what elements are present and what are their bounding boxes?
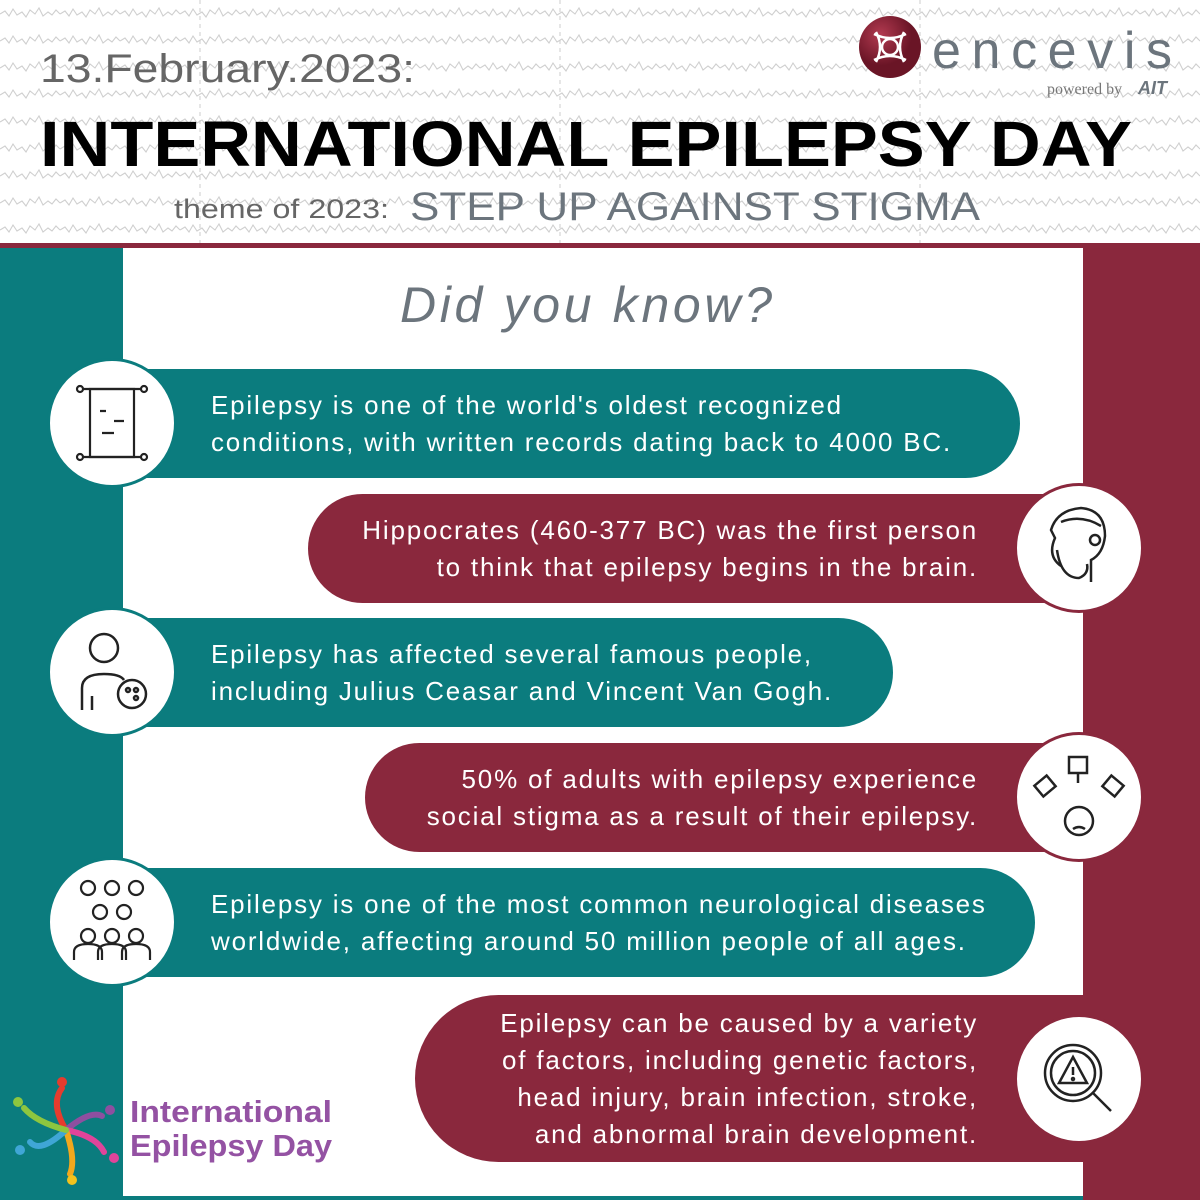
panel: fact 6: head injury, brain infection, stroke, (517, 1082, 978, 1112)
theme subtitle (174, 185, 980, 229)
icon: magnifier warning (1014, 1014, 1144, 1144)
icon: stigma pointing (1014, 732, 1144, 862)
theme subtitle: theme of 2023: (174, 194, 389, 224)
panel: fact 6 (415, 995, 1098, 1162)
logo: International Epilepsy Day (13, 1077, 333, 1185)
right maroon strip (1083, 248, 1200, 1200)
panel: fact 4 (365, 743, 1098, 852)
panel: fact 2: to think that epilepsy begins in the brain. (437, 552, 978, 582)
header background EEG (0, 0, 1200, 243)
panel: fact 6: of factors, including genetic factors, (502, 1044, 978, 1074)
heading: Did you know: Did you know? (400, 277, 772, 333)
panel: fact 1 (100, 369, 1020, 478)
panel: fact 1: conditions, with written records dating back to 4000 BC. (211, 426, 952, 456)
icon: painter (47, 607, 177, 737)
logo: International Epilepsy Day: Epilepsy Day (130, 1128, 333, 1163)
panel: fact 4: 50% of adults with epilepsy experience (462, 764, 978, 794)
panel: fact 2: Hippocrates (460-377 BC) was the first person (362, 514, 978, 544)
panel: fact 3: including Julius Ceasar and Vincent Van Gogh. (211, 676, 833, 706)
logo: encevis: powered by (1047, 81, 1122, 98)
icon: crowd (47, 857, 177, 987)
title: INTERNATIONAL EPILEPSY DAY (40, 108, 1132, 180)
panel: fact 3 (100, 618, 893, 727)
panel: fact 3: Epilepsy has affected several famous people, (211, 638, 813, 668)
date heading: 13.February.2023: (40, 47, 415, 91)
logo: encevis: encevis (932, 22, 1172, 80)
left teal strip (0, 248, 123, 1200)
panel: fact 1: Epilepsy is one of the world's oldest recognized (211, 390, 843, 420)
panel: fact 2 (308, 494, 1098, 603)
panel: fact 5: worldwide, affecting around 50 million people of all ages. (211, 926, 967, 956)
logo: encevis: AIT (1137, 78, 1169, 98)
icon: scroll (47, 358, 177, 488)
theme subtitle: STEP UP AGAINST STIGMA (410, 185, 980, 229)
logo: encevis (859, 16, 1172, 98)
logo: International Epilepsy Day: International (130, 1094, 332, 1129)
icon: hippocrates head (1014, 483, 1144, 613)
divider band (0, 243, 1200, 248)
panel: fact 6: Epilepsy can be caused by a variety (500, 1008, 978, 1038)
panel: fact 5: Epilepsy is one of the most common neurological diseases (211, 888, 987, 918)
panel: fact 5 (100, 868, 1035, 977)
panel: fact 4: social stigma as a result of their epilepsy. (427, 800, 978, 830)
panel: fact 6: and abnormal brain development. (535, 1118, 978, 1148)
